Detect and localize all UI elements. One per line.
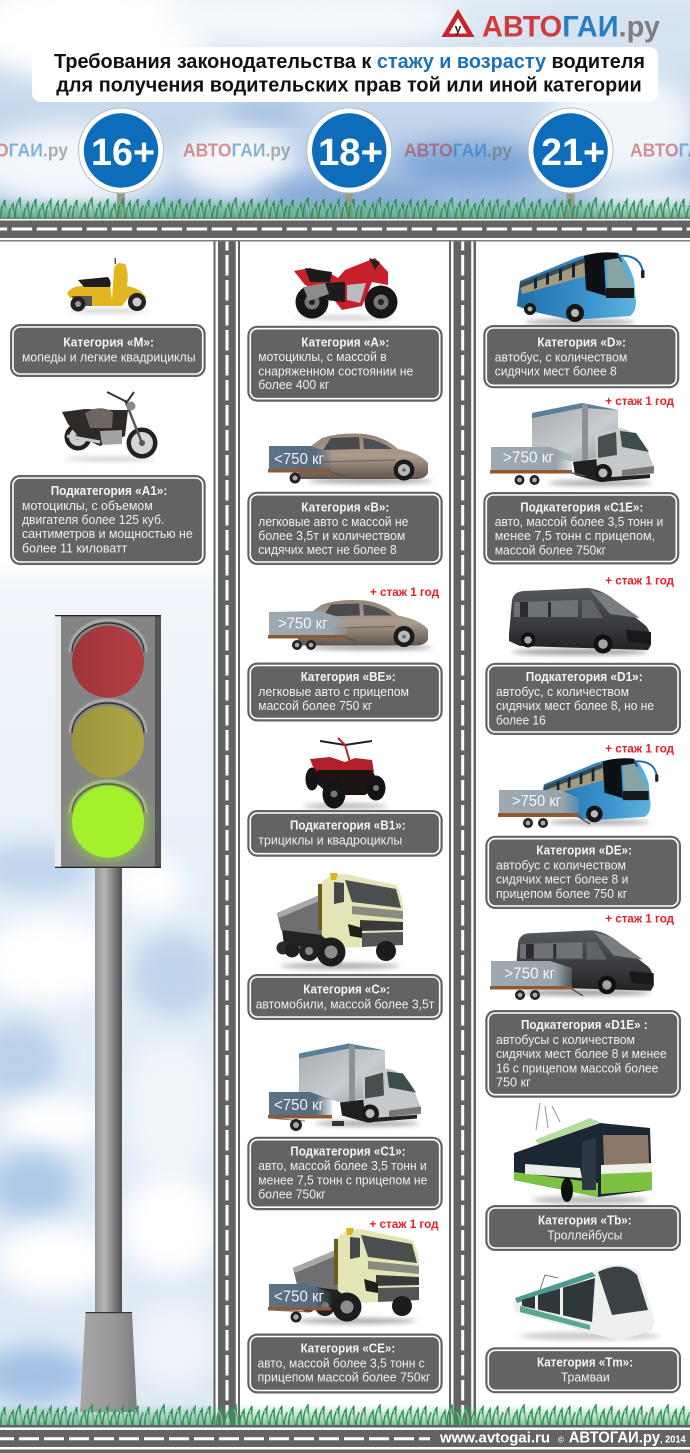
card: D1E: сидячих мест более 8 и менее: [496, 1047, 667, 1061]
vertical road left: [214, 230, 240, 1428]
van: [509, 588, 651, 655]
grass bottom: [0, 1404, 690, 1426]
card: C1E: массой более 750кг: [495, 544, 606, 558]
card: B: легковые авто с массой не: [258, 515, 408, 529]
stage note BE: + стаж 1 год: [370, 585, 439, 599]
website credit: www.avtogai.ru: [439, 1431, 550, 1447]
vertical road right: [449, 230, 476, 1428]
card: C1: авто, массой более 3,5 тонн и: [258, 1159, 427, 1173]
yellow lamp: [72, 706, 144, 778]
card: A1: сантиметров и мощностью не: [22, 527, 193, 541]
card: A: мотоциклы, с массой в: [258, 350, 387, 364]
trolleybus: [514, 1103, 652, 1204]
card: A1: более 11 киловатт: [22, 542, 128, 556]
logo: у: [455, 22, 462, 36]
website credit: , 2014: [660, 1434, 686, 1446]
website credit: [439, 1430, 686, 1447]
sign posts: [117, 192, 574, 219]
card: D1: [485, 663, 681, 735]
bus with large trailer: [498, 758, 658, 828]
bus: [517, 252, 644, 325]
card: BE: легковые авто с прицепом: [258, 685, 409, 699]
trailer label: >750 кг: [504, 965, 555, 982]
card: D1: более 16: [496, 714, 546, 728]
card: M: мопеды и легкие квадрициклы: [22, 350, 196, 364]
card: C: Категория «С»:: [303, 982, 390, 996]
card: D: [483, 325, 679, 388]
card: DE: автобус с количеством: [496, 858, 626, 872]
sign 18+: 18+: [318, 132, 383, 174]
van with large trailer: [490, 930, 654, 1000]
card: CE: прицепом массой более 750кг: [258, 1371, 431, 1385]
card: B1: [247, 810, 443, 857]
card: BE: [247, 662, 443, 722]
card: C1E: [483, 492, 679, 564]
card: C1: более 750кг: [258, 1187, 326, 1201]
card: DE: Категория «DE»:: [536, 843, 632, 857]
sign 18+: [307, 108, 392, 193]
green lamp glow: [69, 783, 147, 861]
card: C1E: авто, массой более 3,5 тонн и: [495, 515, 663, 529]
card: C1: [247, 1137, 443, 1210]
trailer label: >750 кг: [278, 615, 328, 632]
card: BE: Категория «ВЕ»:: [301, 670, 396, 684]
card: C1E: Подкатегория «С1Е»:: [520, 501, 643, 515]
card: DE: [485, 836, 681, 909]
card: C: автомобили, массой более 3,5т: [256, 997, 435, 1011]
scooter: [67, 258, 146, 313]
horizontal road top: [0, 218, 690, 242]
tram: [513, 1264, 660, 1341]
card: B1: трициклы и квадроциклы: [258, 833, 402, 847]
tipper truck with small trailer: [268, 1228, 419, 1324]
card: M: Категория «М»:: [63, 336, 154, 350]
traffic light pole: [80, 866, 137, 1412]
card: A: [247, 326, 443, 402]
title: Требования законодательства к стажу и возрасту водителя: [54, 51, 645, 73]
card: C1: менее 7,5 тонн с прицепом не: [258, 1173, 427, 1187]
stage note CE: + стаж 1 год: [370, 1217, 439, 1231]
motorcycle: [62, 392, 158, 461]
traffic light: [55, 615, 161, 868]
stage note DE: + стаж 1 год: [605, 742, 674, 756]
website credit: ©: [558, 1436, 564, 1445]
card: D1E: 750 кг: [496, 1076, 531, 1090]
card: B: более 3,5т и количеством: [258, 529, 405, 543]
sign 16+: [78, 108, 164, 193]
card: B: [247, 492, 443, 565]
stage note C1E: + стаж 1 год: [605, 394, 674, 408]
card: DE: сидячих мест более 8 и: [496, 872, 628, 886]
card: A: снаряженном состоянии не: [258, 364, 413, 378]
card: C: [247, 974, 443, 1020]
tipper truck: [276, 873, 403, 969]
card: Tb: Категория «Tb»:: [538, 1213, 632, 1227]
card: BE: массой более 750 кг: [258, 699, 373, 713]
logo: АВТОГАИ.ру: [482, 10, 660, 44]
green lamp: [72, 786, 144, 858]
card: A: Категория «А»:: [301, 336, 389, 350]
card: A1: мотоциклы, с объемом: [22, 499, 153, 513]
sport motorcycle: [294, 258, 398, 320]
horizontal road bottom: [0, 1425, 690, 1453]
watermarks: АВТОГАИ.ру: [404, 140, 512, 160]
sign 21+: 21+: [541, 132, 605, 174]
card: CE: авто, массой более 3,5 тонн с: [258, 1356, 425, 1370]
stage note D1E: + стаж 1 год: [605, 912, 674, 926]
card: D: автобус, с количеством: [495, 350, 627, 364]
trailer label: <750 кг: [274, 1097, 324, 1114]
car with small trailer: [268, 434, 432, 484]
card: D1E: Подкатегория «D1E» :: [521, 1018, 648, 1032]
card: CE: [247, 1334, 443, 1394]
card: Tm: Трамваи: [561, 1371, 610, 1385]
card: Tb: Троллейбусы: [547, 1228, 622, 1242]
card: D1E: автобусы с количеством: [496, 1033, 635, 1047]
card: B1: Подкатегория «В1»:: [290, 818, 406, 832]
grass top: [0, 197, 690, 219]
white panels: [240, 241, 690, 1426]
card: A1: Подкатегория «А1»:: [51, 484, 167, 498]
box truck with large trailer: [490, 403, 654, 486]
card: DE: прицепом более 750 кг: [496, 887, 628, 901]
card: Tb: [485, 1205, 681, 1251]
card: A: более 400 кг: [258, 378, 330, 392]
title: [32, 47, 658, 102]
card: C1E: менее 7,5 тонн с прицепом,: [495, 529, 655, 543]
quad bike: [303, 738, 387, 809]
red lamp: [72, 626, 144, 698]
trailer label: >750 кг: [512, 793, 561, 810]
card: D: сидячих мест более 8: [495, 364, 617, 378]
watermarks: [0, 140, 690, 160]
card: D1: Подкатегория «D1»:: [526, 670, 643, 684]
box truck with small trailer: [268, 1044, 421, 1131]
watermarks: АВТОГАИ.ру: [183, 140, 290, 160]
card: B: Категория «В»:: [301, 500, 389, 514]
card: Tm: Категория «Tm»:: [537, 1356, 633, 1370]
trailer label: >750 кг: [503, 450, 554, 467]
card: CE: Категория «СЕ»:: [301, 1342, 395, 1356]
sign 21+: [528, 108, 613, 193]
trailer label: <750 кг: [274, 451, 324, 468]
trailer label: <750 кг: [274, 1289, 324, 1306]
card: D1: автобус, с количеством: [496, 685, 629, 699]
card: A1: двигателя более 125 куб.: [22, 513, 164, 527]
stage note D1: + стаж 1 год: [605, 574, 674, 588]
card: D1: сидячих мест более 8, но не: [496, 699, 654, 713]
card: D: Категория «D»:: [537, 336, 626, 350]
car with large trailer: [268, 600, 432, 650]
card: Tm: [485, 1347, 681, 1393]
card: A1: [10, 475, 206, 565]
card: D1E: 16 с прицепом массой более: [496, 1062, 658, 1076]
website credit: АВТОГАИ.ру: [569, 1430, 660, 1447]
sign 16+: 16+: [91, 132, 155, 174]
card: D1E: [485, 1010, 681, 1098]
card: M: [10, 324, 206, 377]
card: B: сидячих мест не более 8: [258, 543, 397, 557]
title: для получения водительских прав той или иной категории: [56, 75, 642, 97]
card: C1: Подкатегория «С1»:: [290, 1145, 406, 1159]
